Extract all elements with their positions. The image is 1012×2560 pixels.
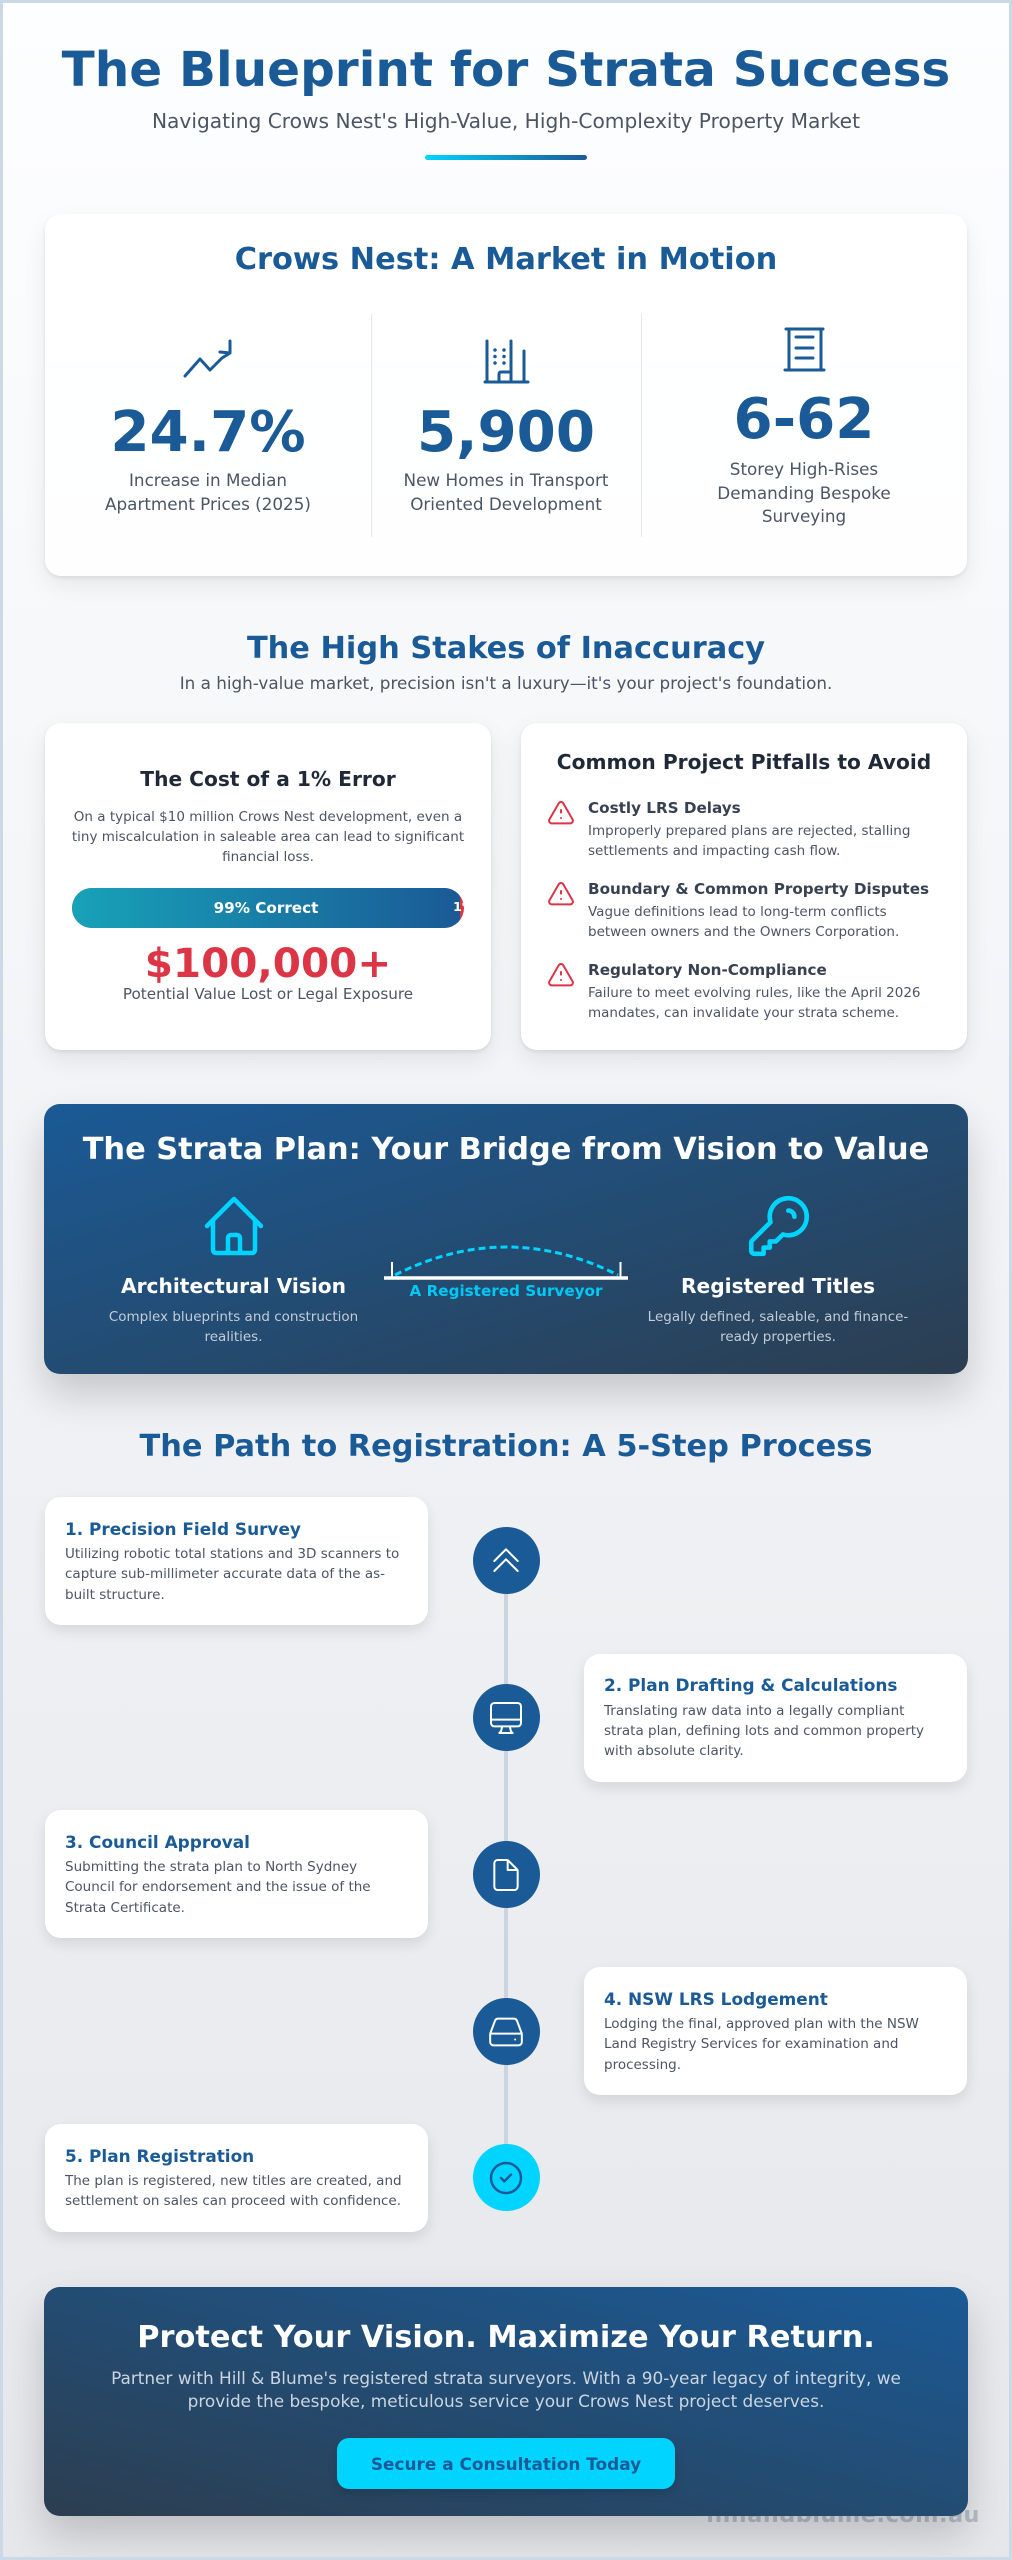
step 1 text [65,1546,399,1603]
step 5 title: 5. Plan Registration [65,2146,254,2166]
step 3 text [65,1859,371,1916]
stat label: high-rises: Storey High-Rises [730,459,878,479]
stat label: prices: Apartment Prices (2025) [105,494,311,514]
card heading: cost: The Cost of a 1% Error [140,767,396,791]
card description: tiny miscalculation in saleable area can lead to significant [72,829,464,845]
accent divider [425,155,587,160]
step 4 card [584,1967,967,2095]
pitfall: boundary disputes [548,880,929,940]
step 1 text: capture sub-millimeter accurate data of the as- [65,1566,385,1582]
divider right [640,314,642,537]
icon: trend chart [183,340,232,378]
stat label: prices [105,470,311,514]
stat: 6-62: 6-62 [734,387,874,452]
icon: tower document [784,328,826,372]
icon: key [748,1196,810,1256]
step 2 text: Translating raw data into a legally compliant [604,1702,904,1718]
step 4 title: 4. NSW LRS Lodgement [604,1988,828,2008]
step 2 text: with absolute clarity. [604,1743,744,1759]
stat: 5,900: 5,900 [417,400,595,465]
step 4 text: Land Registry Services for examination and [604,2036,898,2052]
pitfall: LRS delays [548,799,910,859]
card description: financial loss. [222,849,314,865]
step 3 title: 3. Council Approval [65,1832,250,1852]
pitfall: compliance: Regulatory Non-Compliance [588,961,827,979]
vision description [109,1309,358,1345]
progress bar 99 / 1 [72,888,464,928]
card description: On a typical $10 million Crows Nest development, even a [74,809,462,825]
titles heading: Registered Titles [681,1274,875,1298]
title: The Blueprint for Strata Success [62,42,950,98]
panel: strata plan bridge [44,1104,968,1374]
step 2 node [472,1684,540,1751]
cta text: Partner with Hill & Blume's registered strata surveyors. With a 90-year legacy of integrity, we [111,2368,901,2388]
step 5 text: settlement on sales can proceed with confidence. [65,2193,401,2209]
value lost: $100,000+ [145,939,391,987]
card heading: pitfalls: Common Project Pitfalls to Avoid [557,750,931,774]
pitfall: compliance: mandates, can invalidate your strata scheme. [588,1005,899,1021]
titles description [648,1309,908,1345]
step 3 text: Strata Certificate. [65,1900,185,1916]
step 3 text: Council for endorsement and the issue of the [65,1879,371,1895]
pitfall: compliance [548,961,921,1021]
step 3 text: Submitting the strata plan to North Sydney [65,1859,357,1875]
stat label: homes: New Homes in Transport [404,470,608,490]
step 2 text [604,1702,924,1759]
section intro: In a high-value market, precision isn't a luxury—it's your project's foundation. [180,673,832,693]
bar segment: 99% [72,888,460,928]
icon: buildings [484,340,530,384]
titles description: ready properties. [720,1329,836,1345]
step 3 node [472,1841,540,1908]
stat: 24.7%: 24.7% [110,400,306,465]
step 1 card [45,1497,428,1625]
panel: call to action [44,2287,968,2516]
cta button [337,2438,675,2489]
panel: cost of error [45,723,491,1050]
step 2 card [584,1654,967,1782]
divider left [370,314,372,537]
subtitle: Navigating Crows Nest's High-Value, High-Complexity Property Market [152,109,860,133]
step 1 node [472,1527,540,1594]
step 4 node [472,1998,540,2065]
step 5 text [64,2173,402,2209]
stat label: homes [404,470,608,514]
cta text [111,2368,901,2410]
stat label: high-rises: Surveying [762,506,846,526]
heading: high stakes: The High Stakes of Inaccuracy [247,631,765,666]
icon: house [204,1196,264,1256]
step 4 text: processing. [604,2057,681,2073]
stat label: high-rises: Demanding Bespoke [717,482,891,502]
pitfall: LRS delays: Improperly prepared plans are rejected, stalling [588,823,910,839]
step 5 text: The plan is registered, new titles are created, and [65,2173,402,2189]
step 2 title: 2. Plan Drafting & Calculations [604,1675,897,1695]
vision description: Complex blueprints and construction [109,1309,358,1325]
vision heading: Architectural Vision [121,1274,346,1298]
stat label: high-rises [717,459,891,526]
stat label: homes: Oriented Development [410,494,602,514]
heading: market: Crows Nest: A Market in Motion [235,242,777,277]
surveyor label: A Registered Surveyor [410,1282,602,1300]
pitfall: boundary disputes: Boundary & Common Property Disputes [588,880,929,898]
stat label: prices: Increase in Median [129,470,287,490]
value label: Potential Value Lost or Legal Exposure [123,985,413,1003]
bridge heading: The Strata Plan: Your Bridge from Vision to Value [83,1132,929,1166]
titles description: Legally defined, saleable, and finance- [648,1309,908,1325]
step 4 text [604,2016,919,2073]
timeline connector [504,1594,508,2146]
pitfall: LRS delays: Costly LRS Delays [588,799,741,817]
step 2 text: strata plan, defining lots and common property [604,1723,924,1739]
panel: pitfalls [521,723,967,1050]
cta button: Secure a Consultation Today [371,2454,641,2474]
heading: path: The Path to Registration: A 5-Step Process [140,1428,872,1464]
panel: market in motion [45,214,967,576]
pitfall: boundary disputes: between owners and the Owners Corporation. [588,924,899,940]
card description [72,809,464,865]
pitfall: compliance: Failure to meet evolving rules, like the April 2026 [588,985,921,1001]
step 1 text: built structure. [65,1587,165,1603]
pitfall: LRS delays: settlements and impacting cash flow. [588,843,840,859]
bridge diagram [384,1246,628,1280]
step 3 card [45,1810,428,1938]
cta text: provide the bespoke, meticulous service your Crows Nest project deserves. [188,2390,824,2410]
vision description: realities. [204,1329,262,1345]
step 4 text: Lodging the final, approved plan with the NSW [604,2016,919,2032]
step 5 card [45,2124,428,2232]
step 1 text: Utilizing robotic total stations and 3D scanners to [65,1546,399,1562]
step 1 title: 1. Precision Field Survey [65,1518,301,1538]
cta heading: Protect Your Vision. Maximize Your Return. [137,2320,875,2355]
step 5 node [472,2144,540,2211]
bar segment: 99%: 99% Correct [214,899,318,917]
pitfall: boundary disputes: Vague definitions lead to long-term conflicts [588,904,887,920]
watermark: hillandblume.com.au [706,2502,980,2528]
